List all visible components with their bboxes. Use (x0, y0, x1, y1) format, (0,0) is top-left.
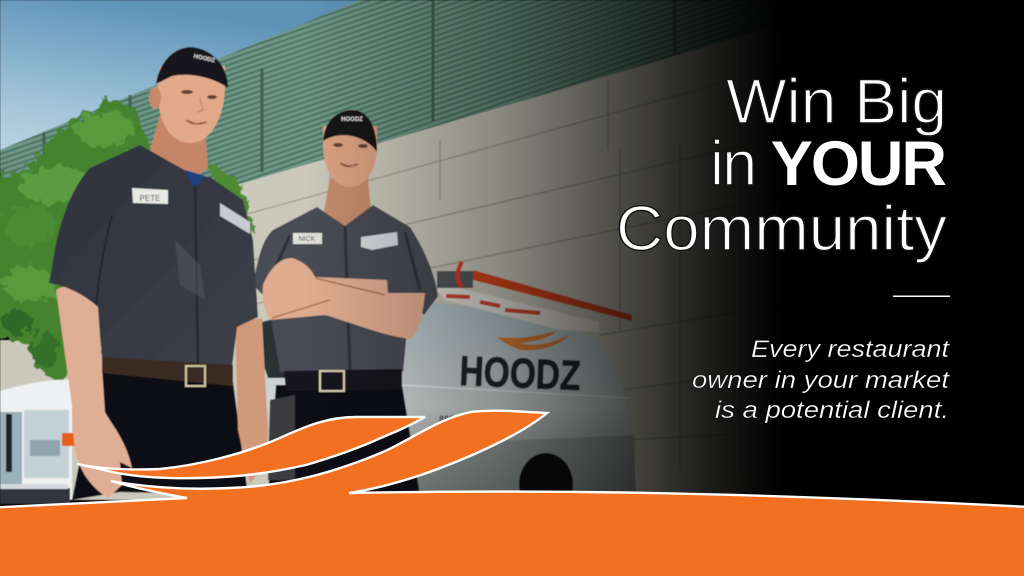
shirt (49, 145, 258, 367)
face features (333, 143, 368, 167)
pants (72, 372, 248, 500)
van (262, 302, 636, 515)
shirt patch (361, 232, 398, 250)
cap logo: HOODZ (341, 117, 363, 123)
right arm and hand (235, 318, 268, 484)
lower swoosh and ground band (0, 411, 1024, 576)
name tag text: NICK (299, 236, 316, 243)
van window (262, 316, 285, 378)
upper swoosh (77, 417, 425, 478)
truck at left (0, 380, 75, 504)
van brand name: HOODZ (459, 347, 581, 399)
pants (268, 385, 420, 495)
neck and face (322, 178, 372, 238)
cap (323, 110, 377, 152)
headline line 3: Community (616, 194, 948, 264)
van phone text: 888 (439, 414, 454, 424)
name tag (293, 233, 322, 244)
crossed arms (263, 258, 425, 339)
belt (102, 357, 233, 386)
name tag text: PETE (140, 194, 160, 203)
face features (181, 90, 217, 124)
technician Nick (253, 110, 438, 495)
technician Pete (49, 47, 268, 500)
shirt patch (220, 203, 250, 234)
sky (0, 0, 380, 200)
headline line 2: in YOUR (710, 129, 947, 199)
cap logo: HOODZ (193, 54, 216, 64)
neck and face (150, 115, 208, 186)
subheading line 3: is a potential client. (715, 397, 949, 424)
belt (284, 369, 402, 391)
subheading (692, 336, 951, 424)
shirt (253, 205, 438, 372)
building louvered upper wall (0, 0, 1024, 260)
right black panel (798, 0, 1024, 576)
subheading line 1: Every restaurant (751, 336, 950, 363)
van wheel arch (519, 453, 573, 515)
van logo flame (497, 331, 570, 350)
left arm and hand (56, 287, 132, 498)
cap (156, 47, 228, 88)
headline line 1: Win Big (726, 67, 947, 137)
roof rack and ladder (437, 262, 632, 332)
name tag (132, 188, 168, 204)
subheading line 2: owner in your market (692, 367, 951, 394)
divider rule (893, 296, 950, 297)
tree (0, 100, 256, 380)
headline (616, 67, 948, 264)
dark fade to black (0, 0, 800, 576)
orange wave base with swoosh (0, 411, 1024, 576)
